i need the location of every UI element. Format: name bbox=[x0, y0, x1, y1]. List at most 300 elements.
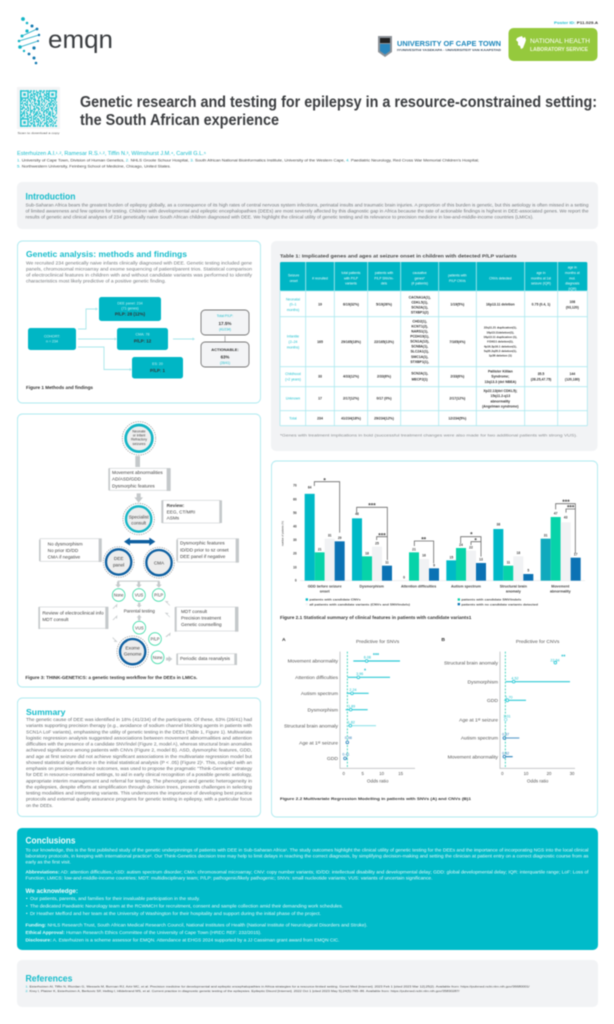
box: MDT consult: MDT consult bbox=[181, 609, 208, 614]
icon: top seizure circle: seizures bbox=[133, 442, 146, 446]
icon: emqn helix logo bbox=[18, 17, 40, 64]
conclusions text: To our knowledge, this is the first published study of the genetic underpinnings of patients with DEE in Sub-Saharan Africa¹. The study outcomes highlight the clinical utility of genetic testing for the DEEs and the importance of incorporating NGS into the local clinical bbox=[26, 848, 589, 853]
row: infantile: 16p13.11deletion(1), bbox=[486, 330, 514, 334]
row: total: Total bbox=[289, 416, 297, 420]
panel: summary: showed statistical significance in the initial statistical analysis (P < .05) (Figure 2)¹. This, coupled with an bbox=[26, 760, 253, 765]
panel: introduction: results of genetic and clinical analyses of 234 genetically naive South African children diagnosed with DEE. We highlight the clinical utility of genetic testing and its relevance to precision medicine in low-and-middle-income countries (LMICs). bbox=[26, 214, 534, 220]
row: infantile: (2–24 bbox=[289, 340, 298, 344]
panel: summary: and age at first seizure did not achieve significant associations in the multivariate regression model but bbox=[26, 754, 253, 759]
figure 3 caption: Figure 3: THINK-GENETICS: a genetic testing workflow for the DEEs in LMICs. bbox=[25, 675, 197, 680]
row: neonatal: 5/19(26%) bbox=[376, 303, 392, 307]
table header: patients with bbox=[375, 271, 393, 275]
box: no dysmorphism: No dysmorphism bbox=[48, 541, 83, 546]
forest plot B: CNVs: 0.87 bbox=[502, 732, 509, 736]
value labels: 16 bbox=[422, 554, 426, 558]
forest plot B: CNVs: Odds ratio bbox=[527, 778, 549, 783]
forest plot A: SNVs: 2.24 bbox=[349, 688, 357, 692]
UCT name: UNIVERSITY OF CAPE TOWN bbox=[397, 39, 501, 48]
row: childhood: (28.25,47.75) bbox=[531, 377, 551, 381]
box: actionable: ACTIONABLE: bbox=[211, 347, 239, 352]
group labels: Attention difficulties bbox=[401, 585, 436, 589]
row: infantile: 7/165(4%) bbox=[449, 340, 465, 344]
group labels bbox=[308, 585, 572, 594]
emqn wordmark: emqn bbox=[48, 26, 113, 54]
value labels: 64 bbox=[308, 486, 312, 490]
box: total P/LP: (41/234) bbox=[219, 328, 231, 332]
panel: summary: The genetic cause of DEE was identified in 18% (41/234) of the participants. Of these, 63% (26/41) had bbox=[26, 717, 253, 722]
table header: Seizure bbox=[288, 274, 299, 278]
forest plot A: SNVs bbox=[282, 637, 415, 783]
row: childhood: 144 bbox=[569, 372, 575, 376]
forest plot A: SNVs: 3.96 bbox=[356, 672, 363, 676]
result: VUS 2: VUS bbox=[135, 625, 144, 630]
box: MDT consult: Genetic counselling bbox=[181, 622, 222, 627]
forest plot A: SNVs: Attention difficulties bbox=[295, 675, 339, 681]
significance brackets bbox=[314, 477, 575, 563]
significance brackets: *** bbox=[567, 504, 575, 511]
value labels: 13 bbox=[479, 558, 483, 562]
box: dysmorphic features: ID/DD prior to sz onset bbox=[180, 547, 229, 552]
table header: age in bbox=[536, 271, 546, 275]
value labels: 31 bbox=[328, 533, 332, 537]
significance brackets: * bbox=[470, 531, 473, 538]
box: movement abnormalities bbox=[108, 456, 171, 491]
conclusions text: early as the first visit. bbox=[26, 860, 71, 865]
icon: UCT shield bbox=[378, 36, 392, 57]
panel: genetic analysis methods and findings bbox=[18, 241, 260, 403]
funding and disclosure: Disclosure: A. Esterhuizen is a scheme assessor for EMQN. Attendance at EHGS 2024 supported by a JJ Cassiman grant award from EMQN CIC. bbox=[26, 938, 340, 942]
panel: figures 2 bbox=[272, 461, 598, 817]
table header: with P/LP bbox=[344, 276, 359, 280]
value labels: 31 bbox=[544, 533, 548, 537]
row: infantile: 29/165(18%) bbox=[341, 340, 361, 344]
figure 2.1 caption: Figure 2.1 Statistical summary of clinical features in patients with candidate variants1 bbox=[280, 615, 472, 620]
row: infantile: NARS1(1), bbox=[411, 329, 428, 333]
row: infantile: 1p36 deletion (1) bbox=[489, 354, 512, 358]
result: VUS: VUS bbox=[135, 593, 143, 598]
authors: Esterhuizen A.I.¹˒², Ramesar R.S.¹˒², Tiffin N.³, Wilmshurst J.M.⁴, Carvill G.L.⁵ bbox=[17, 151, 206, 157]
box: DEE panel: (71 genes) bbox=[121, 306, 139, 310]
box: CMA bbox=[117, 328, 168, 350]
box: DEE panel: DEE panel: 234 bbox=[117, 302, 143, 306]
table header: variants bbox=[345, 282, 357, 286]
value labels bbox=[308, 486, 578, 579]
forest plot A: SNVs: Age at 1ˢᵗ seizure bbox=[299, 740, 338, 746]
group labels: Movement bbox=[551, 585, 570, 589]
y axis: 0 bbox=[295, 579, 297, 583]
acknowledgements: Dr Heather Mefford and her team at the University of Washington for their hospitality and support during the initial phase of the project. bbox=[30, 911, 321, 916]
result: P/LP: P/LP bbox=[154, 593, 163, 598]
row: unknown: 2/17(12%) bbox=[343, 397, 359, 401]
forest plot A: SNVs: GDD bbox=[327, 756, 338, 762]
acknowledgements: • bbox=[26, 904, 28, 908]
QR code bbox=[17, 87, 60, 129]
box: no dysmorphism: CMA if negative bbox=[48, 555, 81, 560]
row: childhood bbox=[285, 369, 580, 384]
panel: references: 1. Esterhuizen AI, Tiffin N, Riordan G, Wessels M, Burman RJ, Aziz MC, et al. Precision medicine for developmental and epileptic encephalopathies in Africa-strategies for a resource-limited setting. Genet Med [Internet]. 2023 Feb 1 [cited 2023 Mar 12];25(2). Available from: https://pubmed.ncbi.nlm.nih.gov/36680001/ bbox=[26, 984, 530, 988]
value labels: 5 bbox=[527, 569, 529, 573]
result: VUS 2 bbox=[133, 621, 146, 634]
row: childhood: 4/33(12%) bbox=[343, 375, 359, 379]
panel: genetic analysis methods and findings: of electroclinical features in children with and without candidate variants was performed to identify bbox=[26, 272, 253, 277]
funding and disclosure: Ethical Approval: Human Research Ethics Committee of the University of Cape Town (HREC REF: 232/2015). bbox=[26, 930, 262, 935]
table header: genes* bbox=[414, 276, 426, 280]
NHLS logo bbox=[508, 28, 598, 61]
forest plot A: SNVs: Predictive for SNVs bbox=[356, 639, 400, 645]
panel: genetic analysis methods and findings: panels, chromosomal microarray and exome sequencing of patient/parent trios. Statistical comparison bbox=[26, 266, 253, 271]
conclusions text bbox=[26, 848, 589, 865]
value labels: 9 bbox=[433, 563, 435, 567]
icon: DEE panel bbox=[103, 547, 134, 577]
row: infantile: 22/165(13%) bbox=[374, 340, 394, 344]
panel: references: References bbox=[26, 974, 72, 984]
icon: top seizure circle: Refractory bbox=[131, 437, 147, 441]
panel: think-genetics workflow bbox=[18, 414, 260, 687]
row: total bbox=[289, 416, 466, 420]
table header: CNVs detected bbox=[489, 276, 512, 280]
y axis: 30 bbox=[293, 538, 297, 542]
panel: references bbox=[17, 960, 598, 1007]
value labels: 17 bbox=[574, 553, 578, 557]
box: actionable: (26/41) bbox=[220, 361, 230, 365]
forest plot B: CNVs: Dysmorphism bbox=[468, 679, 498, 685]
y axis: 20 bbox=[293, 552, 297, 556]
box: DEE panel: P/LP: 28 (12%) bbox=[115, 312, 146, 316]
box: review: ASMs bbox=[167, 516, 180, 521]
forest plot A: SNVs: 1.89 bbox=[348, 704, 355, 708]
table header: seizure (IQR) bbox=[531, 282, 551, 286]
icon: specialist consult: Specialist bbox=[129, 514, 149, 519]
y axis bbox=[282, 484, 297, 583]
forest plot B: CNVs: 22.84 bbox=[550, 658, 560, 662]
panel: summary: the epilepsies, despite efforts at simplification through decision trees, presents challenges in selecting bbox=[26, 784, 253, 790]
funding and disclosure: Funding: NHLS Research Trust, South African Medical Research Council, National Institutes of Health (National Institute of Neurological Disorders and Stroke). bbox=[26, 922, 368, 928]
table header: (IQR) bbox=[568, 287, 576, 291]
row: infantile: SLC2A1(1), bbox=[410, 350, 429, 354]
forest plot B: CNVs: 10 bbox=[524, 771, 529, 776]
forest plot B: CNVs: Structural brain anomaly bbox=[444, 660, 498, 666]
icon: top seizure circle: Neonate bbox=[132, 429, 146, 433]
value labels: 21 bbox=[412, 547, 416, 551]
result: none bbox=[112, 589, 125, 601]
panel: references: 2. Krey I, Platzer K, Esterhuizen A, Berkovic SF, Helbig I, Hildebrand MS, et al. Current practice in diagnostic genetic testing of the epilepsies. Epileptic Disord [Internet]. 2022 Oct 1 [cited 2023 May 5];24(5):765–86. Available from: https://pubmed.ncbi.nlm.nih.gov/35830287/ bbox=[26, 989, 460, 993]
icon: CMA bbox=[144, 547, 174, 578]
result: P/LP bbox=[152, 589, 165, 601]
icon: top seizure circle: or infant bbox=[133, 433, 145, 437]
box: review of electroclinical info: Review of electroclinical info bbox=[42, 610, 104, 615]
acknowledgements: Our patients, parents, and families for their invaluable participation in the study. bbox=[30, 896, 200, 901]
row: total: 12/234(5%) bbox=[448, 416, 466, 420]
box: total P/LP: Total P/LP: bbox=[217, 314, 233, 318]
panel: genetic analysis methods and findings: characteristics most likely predictive of a positive genetic finding. bbox=[26, 278, 166, 283]
forest plot A: SNVs: A bbox=[282, 637, 286, 643]
value labels: 11 bbox=[507, 561, 510, 565]
acknowledgements: • bbox=[26, 911, 28, 916]
y axis: 60 bbox=[293, 497, 297, 501]
row: childhood: 2/33(6%) bbox=[377, 375, 391, 379]
panel: summary: on the DEEs. bbox=[26, 803, 53, 808]
double arrow bbox=[124, 538, 155, 546]
row: neonatal: SCN2A(1), bbox=[411, 305, 428, 309]
row: unknown: 0/17 (0%) bbox=[377, 397, 391, 401]
row: childhood: 2/33(6%) bbox=[450, 375, 464, 379]
row: infantile: 4p16.3p16.1 deletion(1), bbox=[484, 344, 517, 348]
UCT name: IYUNIVESITHI YASEKAPA · UNIVERSITEIT VAN KAAPSTAD bbox=[397, 48, 502, 52]
group labels: anomaly bbox=[506, 590, 522, 594]
box: cohort: n = 234 bbox=[46, 340, 58, 344]
significance brackets: *** bbox=[562, 499, 570, 506]
title: the South African experience bbox=[80, 112, 279, 129]
forest plot B: CNVs: 20 bbox=[547, 771, 552, 776]
panel: introduction: Sub-Saharan Africa bears the greatest burden of epilepsy globally, as a consequence of its high rates of central nervous system infections, perinatal insults and traumatic brain injuries. A proportion of this burden is genetic, but this aetiology is often missed in a setting bbox=[26, 202, 589, 208]
panel: conclusions bbox=[17, 828, 598, 950]
row: childhood: 35.5 bbox=[538, 372, 544, 376]
forest plot B: CNVs: GDD bbox=[487, 698, 498, 704]
forest plot B: CNVs: 0.82 bbox=[502, 751, 509, 755]
forest plot B: CNVs: ** bbox=[561, 655, 566, 661]
table header: mol. bbox=[569, 276, 576, 280]
value labels: 25 bbox=[375, 541, 379, 545]
forest plot B: CNVs: 1.70 bbox=[505, 695, 513, 699]
legend: all patients with candidate variants (CNVs and SNV/indels) bbox=[309, 602, 410, 606]
box: review: EEG, CT/MRI bbox=[167, 509, 195, 514]
row: infantile: SCN8A(1), bbox=[411, 345, 428, 349]
box: dysmorphic features: DEE panel if negative bbox=[180, 554, 226, 559]
row: childhood: SCN2A(1), bbox=[411, 372, 428, 376]
acknowledgements: The dedicated Paediatric Neurology team at the RCWMCH for recruitment, consent and sample collection amid their demanding work schedules. bbox=[30, 904, 343, 908]
result: none 2: None bbox=[153, 655, 163, 660]
NHLS logo: NATIONAL HEALTH bbox=[530, 38, 590, 45]
forest plot B: CNVs: Autism spectrum bbox=[461, 736, 498, 742]
legend: patients with candidate CNVs bbox=[309, 598, 361, 602]
row: unknown bbox=[286, 389, 519, 409]
row: unknown: Xp22.13(del CDKL5); bbox=[483, 389, 517, 393]
row: unknown: abnormality bbox=[491, 399, 510, 403]
forest plot A: SNVs: 15 bbox=[398, 771, 404, 776]
panel: summary: Summary bbox=[26, 707, 66, 717]
box: MDT consult: Precision treatment bbox=[181, 616, 222, 621]
acknowledgements: We acknowledge: bbox=[26, 888, 78, 895]
significance brackets: *** bbox=[378, 533, 386, 540]
row: neonatal: 19 bbox=[318, 303, 322, 307]
group labels: Dysmorphism bbox=[359, 585, 385, 589]
chart: figure 1 methods flow bbox=[28, 297, 249, 378]
significance brackets: * bbox=[474, 537, 477, 544]
box: total P/LP bbox=[201, 310, 249, 335]
row: infantile bbox=[287, 319, 517, 364]
y axis: 40 bbox=[293, 525, 297, 529]
box: dysmorphic features bbox=[176, 539, 239, 563]
row: unknown: Unknown bbox=[286, 397, 300, 401]
forest plot B: CNVs: 4.52 bbox=[511, 677, 519, 681]
group labels: onset bbox=[320, 590, 330, 594]
forest plot B: CNVs: Age at 1ˢᵗ seizure bbox=[459, 717, 498, 723]
panel: summary: protocols and external quality assurance programs for genetic testing in epilepsy, with a particular focus bbox=[26, 797, 252, 802]
box: no dysmorphism: No prior ID/DD bbox=[48, 548, 79, 553]
icon: exome genome: Genome bbox=[124, 652, 142, 657]
panel: introduction: of limited awareness and few options for testing. Children with developmental and epileptic encephalopathies (DEEs) are most severely affected by this diagnostic gap in Africa because the rate of actionable findings is highest in DEE-associated genes. We report the bbox=[26, 208, 589, 214]
table header: P/LP CNVs bbox=[449, 279, 466, 283]
row: infantile: STXBP1(1), bbox=[410, 360, 429, 364]
table grid bbox=[280, 262, 587, 426]
row: neonatal: 6/19(32%) bbox=[343, 303, 359, 307]
panel: summary: testing modalities and interpreting variants. This underscores the importance of developing best practice bbox=[26, 791, 253, 796]
result: none 2 bbox=[151, 651, 164, 664]
forest plot A: SNVs: 0.41 bbox=[342, 752, 350, 756]
legend bbox=[306, 598, 538, 606]
affiliations bbox=[17, 158, 479, 168]
panel: summary: emphasis on precision medicine outcomes, was used to propose the pragmatic "Think-Genetics" strategy bbox=[26, 766, 253, 771]
row: childhood: 33 bbox=[318, 375, 322, 379]
table header: onset bbox=[290, 279, 298, 283]
row: infantile: KCNT1(2), bbox=[411, 324, 428, 328]
result: P/LP 2 bbox=[149, 633, 161, 645]
row: unknown: 2/17(12%) bbox=[449, 397, 465, 401]
UCT name bbox=[397, 39, 502, 52]
row: unknown: 15q11.2-q13 bbox=[491, 394, 510, 398]
box: review of electroclinical info: MDT consult bbox=[42, 617, 69, 622]
row: total: 29/234(12%) bbox=[374, 416, 394, 420]
acknowledgements bbox=[26, 888, 343, 916]
value labels: 24 bbox=[459, 543, 463, 547]
affiliations: 1. University of Cape Town, Division of Human Genetics, 2. NHLS Groote Schuur Hospital, 3. South African National Bioinformatics Institute, University of the Western Cape, 4. Paediatric Neurology, Red Cross War Memorial Children's Hospital; bbox=[17, 158, 479, 162]
forest plot B: CNVs: Predictive for CNVs bbox=[516, 639, 560, 645]
box: DEE panel bbox=[99, 297, 161, 321]
box: movement abnormalities: Movement abnormalities bbox=[112, 470, 163, 475]
panel: summary: achieved significance among patients with CNVs (Figure 2, model B). ASD, dysmorphic features, GDD, bbox=[26, 748, 252, 753]
table header: causative bbox=[413, 271, 427, 275]
box: ES: ES: 20 bbox=[152, 362, 163, 366]
box: CMA: P/LP: 12 bbox=[134, 338, 152, 344]
box: cohort: COHORT: bbox=[44, 334, 60, 338]
value labels: 21 bbox=[318, 547, 322, 551]
row: neonatal: CDKL5(1), bbox=[411, 300, 428, 304]
panel: genetic analysis methods and findings: We recruited 234 genetically naive infants clinically diagnosed with DEE. Genetic testing included gene bbox=[26, 260, 253, 266]
row: infantile: PCDH19(1), bbox=[410, 335, 429, 339]
row: childhood: (>2 years) bbox=[285, 377, 301, 381]
table header: diagnosis bbox=[565, 282, 580, 286]
legend: patients with candidate SNV/indels bbox=[461, 598, 522, 602]
result: P/LP 2: P/LP bbox=[150, 637, 160, 642]
icon: exome genome bbox=[117, 636, 148, 667]
box: review: Review: bbox=[167, 503, 185, 508]
row: unknown: 17 bbox=[318, 397, 322, 401]
table title: Table 1: Implicated genes and ages at seizure onset in children with detected P/LP variants bbox=[280, 254, 518, 259]
y axis: number of patients (%) bbox=[282, 521, 285, 546]
connector arrows bbox=[115, 581, 162, 588]
box: total P/LP: 17.5% bbox=[218, 321, 232, 326]
forest plot B: CNVs: B bbox=[441, 637, 445, 643]
panel: summary: for DEE in resource-constrained settings, to aid in early clinical recognition of a possible genetic aetiology, bbox=[26, 772, 252, 777]
row: childhood: (120,180) bbox=[565, 377, 580, 381]
forest plot B: CNVs: 30 bbox=[570, 771, 575, 776]
value labels: 22 bbox=[469, 545, 473, 549]
box: movement abnormalities: AD/ASD/GDD bbox=[112, 477, 142, 482]
value labels: 18 bbox=[365, 551, 369, 555]
panel: table 1 bbox=[271, 241, 598, 451]
row: neonatal bbox=[286, 295, 579, 314]
row: childhood: Pallister Killian bbox=[488, 369, 513, 373]
box: actionable bbox=[201, 342, 249, 367]
forest plot A: SNVs: Autism spectrum bbox=[301, 691, 338, 697]
forest plot A: SNVs: Odds ratio bbox=[367, 778, 389, 783]
box: no dysmorphism bbox=[39, 539, 102, 562]
icon: top seizure circle bbox=[122, 422, 156, 455]
panel: summary: appropriate interim management and referral for testing. The phenotypic and genetic heterogeneity in bbox=[26, 778, 253, 783]
forest plot A: SNVs: Structural brain anomaly bbox=[284, 723, 338, 729]
panel: summary: SCN1A LoF variants), emphasising the utility of genetic testing in the DEEs (Table 1, Figure 1). Multivariate bbox=[26, 729, 253, 734]
row: neonatal: 16p13.11 deletion bbox=[486, 303, 515, 307]
parental testing: Parental testing bbox=[124, 608, 155, 613]
value labels: 15 bbox=[449, 555, 453, 559]
poster ID: Poster ID: P11.029.A bbox=[554, 21, 598, 25]
table header: months at 1st bbox=[531, 276, 551, 280]
significance brackets: * bbox=[323, 477, 326, 484]
box: ES bbox=[132, 357, 183, 378]
table header: patients with bbox=[448, 274, 467, 278]
value labels: 38 bbox=[496, 522, 500, 526]
panel: summary: difficulties with the presence of a candidate SNV/indel (Figure 2, model A), whereas structural brain anomalies bbox=[26, 742, 252, 746]
value labels: 43 bbox=[564, 515, 568, 519]
row: neonatal: CACNA1A(1), bbox=[409, 295, 431, 299]
row: neonatal: 108 bbox=[569, 300, 575, 304]
figure 2.2 caption: Figure 2.2 Multivariate Regression Modelling in patients with SNVs (A) and CNVs (B)1 bbox=[280, 797, 472, 801]
forest plot A: SNVs: * bbox=[364, 669, 367, 675]
table header bbox=[288, 266, 580, 291]
icon: specialist consult: consult bbox=[131, 521, 147, 526]
y axis: 50 bbox=[293, 511, 297, 515]
row: total: 41/234(18%) bbox=[341, 416, 361, 420]
row: neonatal: (0–1 bbox=[290, 303, 297, 307]
row: infantile: Infantile bbox=[287, 335, 299, 339]
row: infantile: 165 bbox=[317, 340, 323, 344]
panel: introduction bbox=[17, 182, 598, 229]
row: neonatal: Neonatal bbox=[286, 297, 300, 301]
abbreviations: Abbreviations: AD: attention difficulties; ASD: autism spectrum disorder; CMA: chromosomal microarray; CNV: copy number variants; ID/DD: intellectual disability and developmental delay; GDD: global developmental delay; IQR: interquartile range; LoF: Loss of bbox=[26, 870, 589, 874]
box: review bbox=[161, 500, 222, 523]
y axis: 10 bbox=[293, 565, 297, 569]
box: review of electroclinical info bbox=[38, 607, 108, 629]
row: neonatal: 0.75 (0.4, 1) bbox=[532, 303, 550, 307]
forest plot A: SNVs: 5 bbox=[361, 771, 364, 776]
icon: DEE panel: panel bbox=[113, 562, 124, 567]
box: periodic data reanalysis: Periodic data reanalysis bbox=[180, 656, 231, 661]
table header: P/LP SNV/in- bbox=[374, 276, 394, 280]
icon: DEE panel: DEE bbox=[114, 556, 123, 561]
icon: exome genome: Exome bbox=[125, 645, 140, 650]
row: infantile: months) bbox=[287, 345, 299, 349]
panel: introduction: Introduction bbox=[26, 192, 76, 202]
row: childhood: MECP2(1) bbox=[412, 377, 428, 381]
significance brackets: *** bbox=[368, 502, 376, 509]
small arrows bbox=[112, 601, 172, 662]
value labels: 18 bbox=[516, 551, 520, 555]
row: total: 234 bbox=[317, 416, 323, 420]
table footnote: *Genes with treatment implications in bold (successful treatment changes were also made for two additional patients with strong VUS). bbox=[280, 432, 577, 437]
table header: age in bbox=[568, 266, 577, 270]
abbreviations bbox=[26, 870, 589, 880]
row: unknown: (Angelman syndrome) bbox=[482, 405, 519, 409]
box: movement abnormalities: Dysmorphic features bbox=[112, 483, 155, 488]
acknowledgements: • bbox=[26, 896, 28, 901]
panel: genetic analysis methods and findings: Genetic analysis: methods and findings bbox=[26, 249, 187, 259]
arrow bbox=[134, 493, 143, 503]
QR caption: Scan to download a copy bbox=[18, 131, 60, 135]
icon: CMA: CMA bbox=[154, 560, 165, 565]
forest plot B: CNVs bbox=[441, 637, 575, 783]
title bbox=[80, 94, 597, 129]
table header: # recruited bbox=[312, 276, 328, 280]
